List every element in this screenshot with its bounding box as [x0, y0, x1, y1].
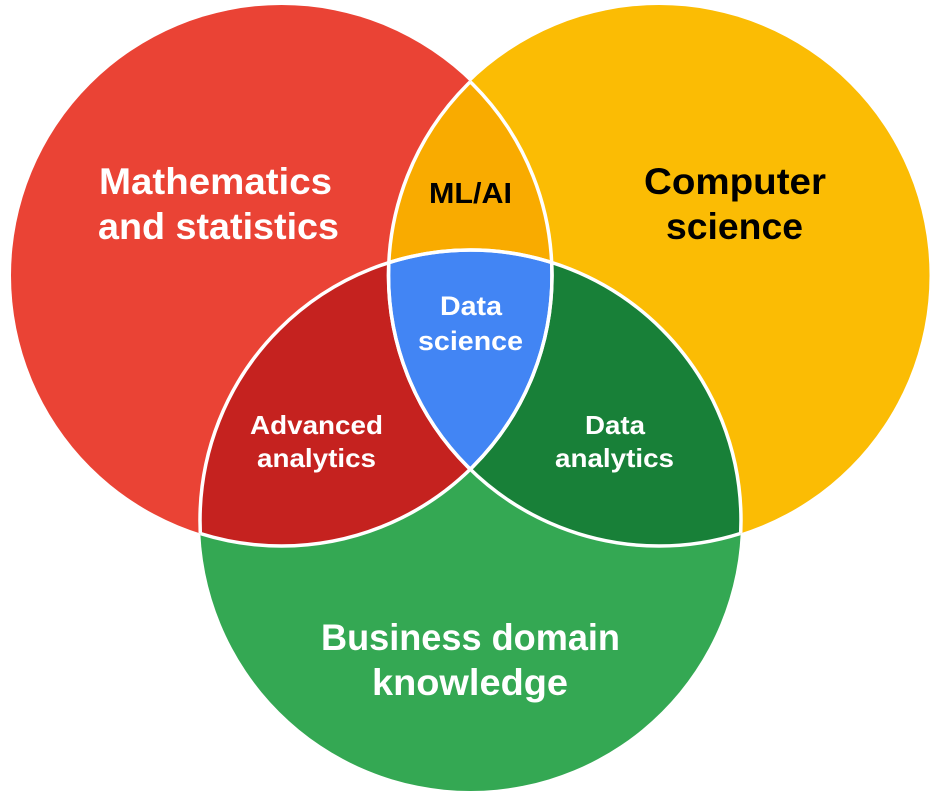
circle: business domain knowledge [200, 250, 741, 791]
label: mathematics and statistics: and statistics [98, 206, 339, 247]
label: computer science [644, 161, 826, 247]
label: mathematics and statistics: Mathematics [99, 161, 332, 202]
label: business domain knowledge [321, 617, 620, 703]
overlap: data analytics [473, 265, 740, 544]
label: data analytics [555, 410, 674, 473]
label: business domain knowledge: knowledge [372, 662, 568, 703]
label: data science: Data [440, 291, 503, 321]
label: advanced analytics: Advanced [250, 410, 383, 440]
label: advanced analytics: analytics [257, 443, 376, 473]
label: data analytics: analytics [555, 443, 674, 473]
circle: mathematics and statistics [11, 5, 552, 546]
label: computer science: Computer [644, 161, 826, 202]
overlap: ML/AI [390, 84, 550, 260]
label: data science: science [418, 326, 523, 356]
overlap: advanced analytics [202, 265, 468, 544]
label: ML/AI: ML/AI [429, 178, 512, 210]
circle: computer science [388, 5, 930, 546]
overlap: data science [390, 252, 550, 466]
label: data science [418, 291, 523, 356]
label: computer science: science [666, 206, 803, 247]
label: advanced analytics [250, 410, 383, 473]
label: business domain knowledge: Business domain [321, 617, 620, 658]
label: data analytics: Data [585, 410, 646, 440]
label: mathematics and statistics [98, 161, 339, 247]
